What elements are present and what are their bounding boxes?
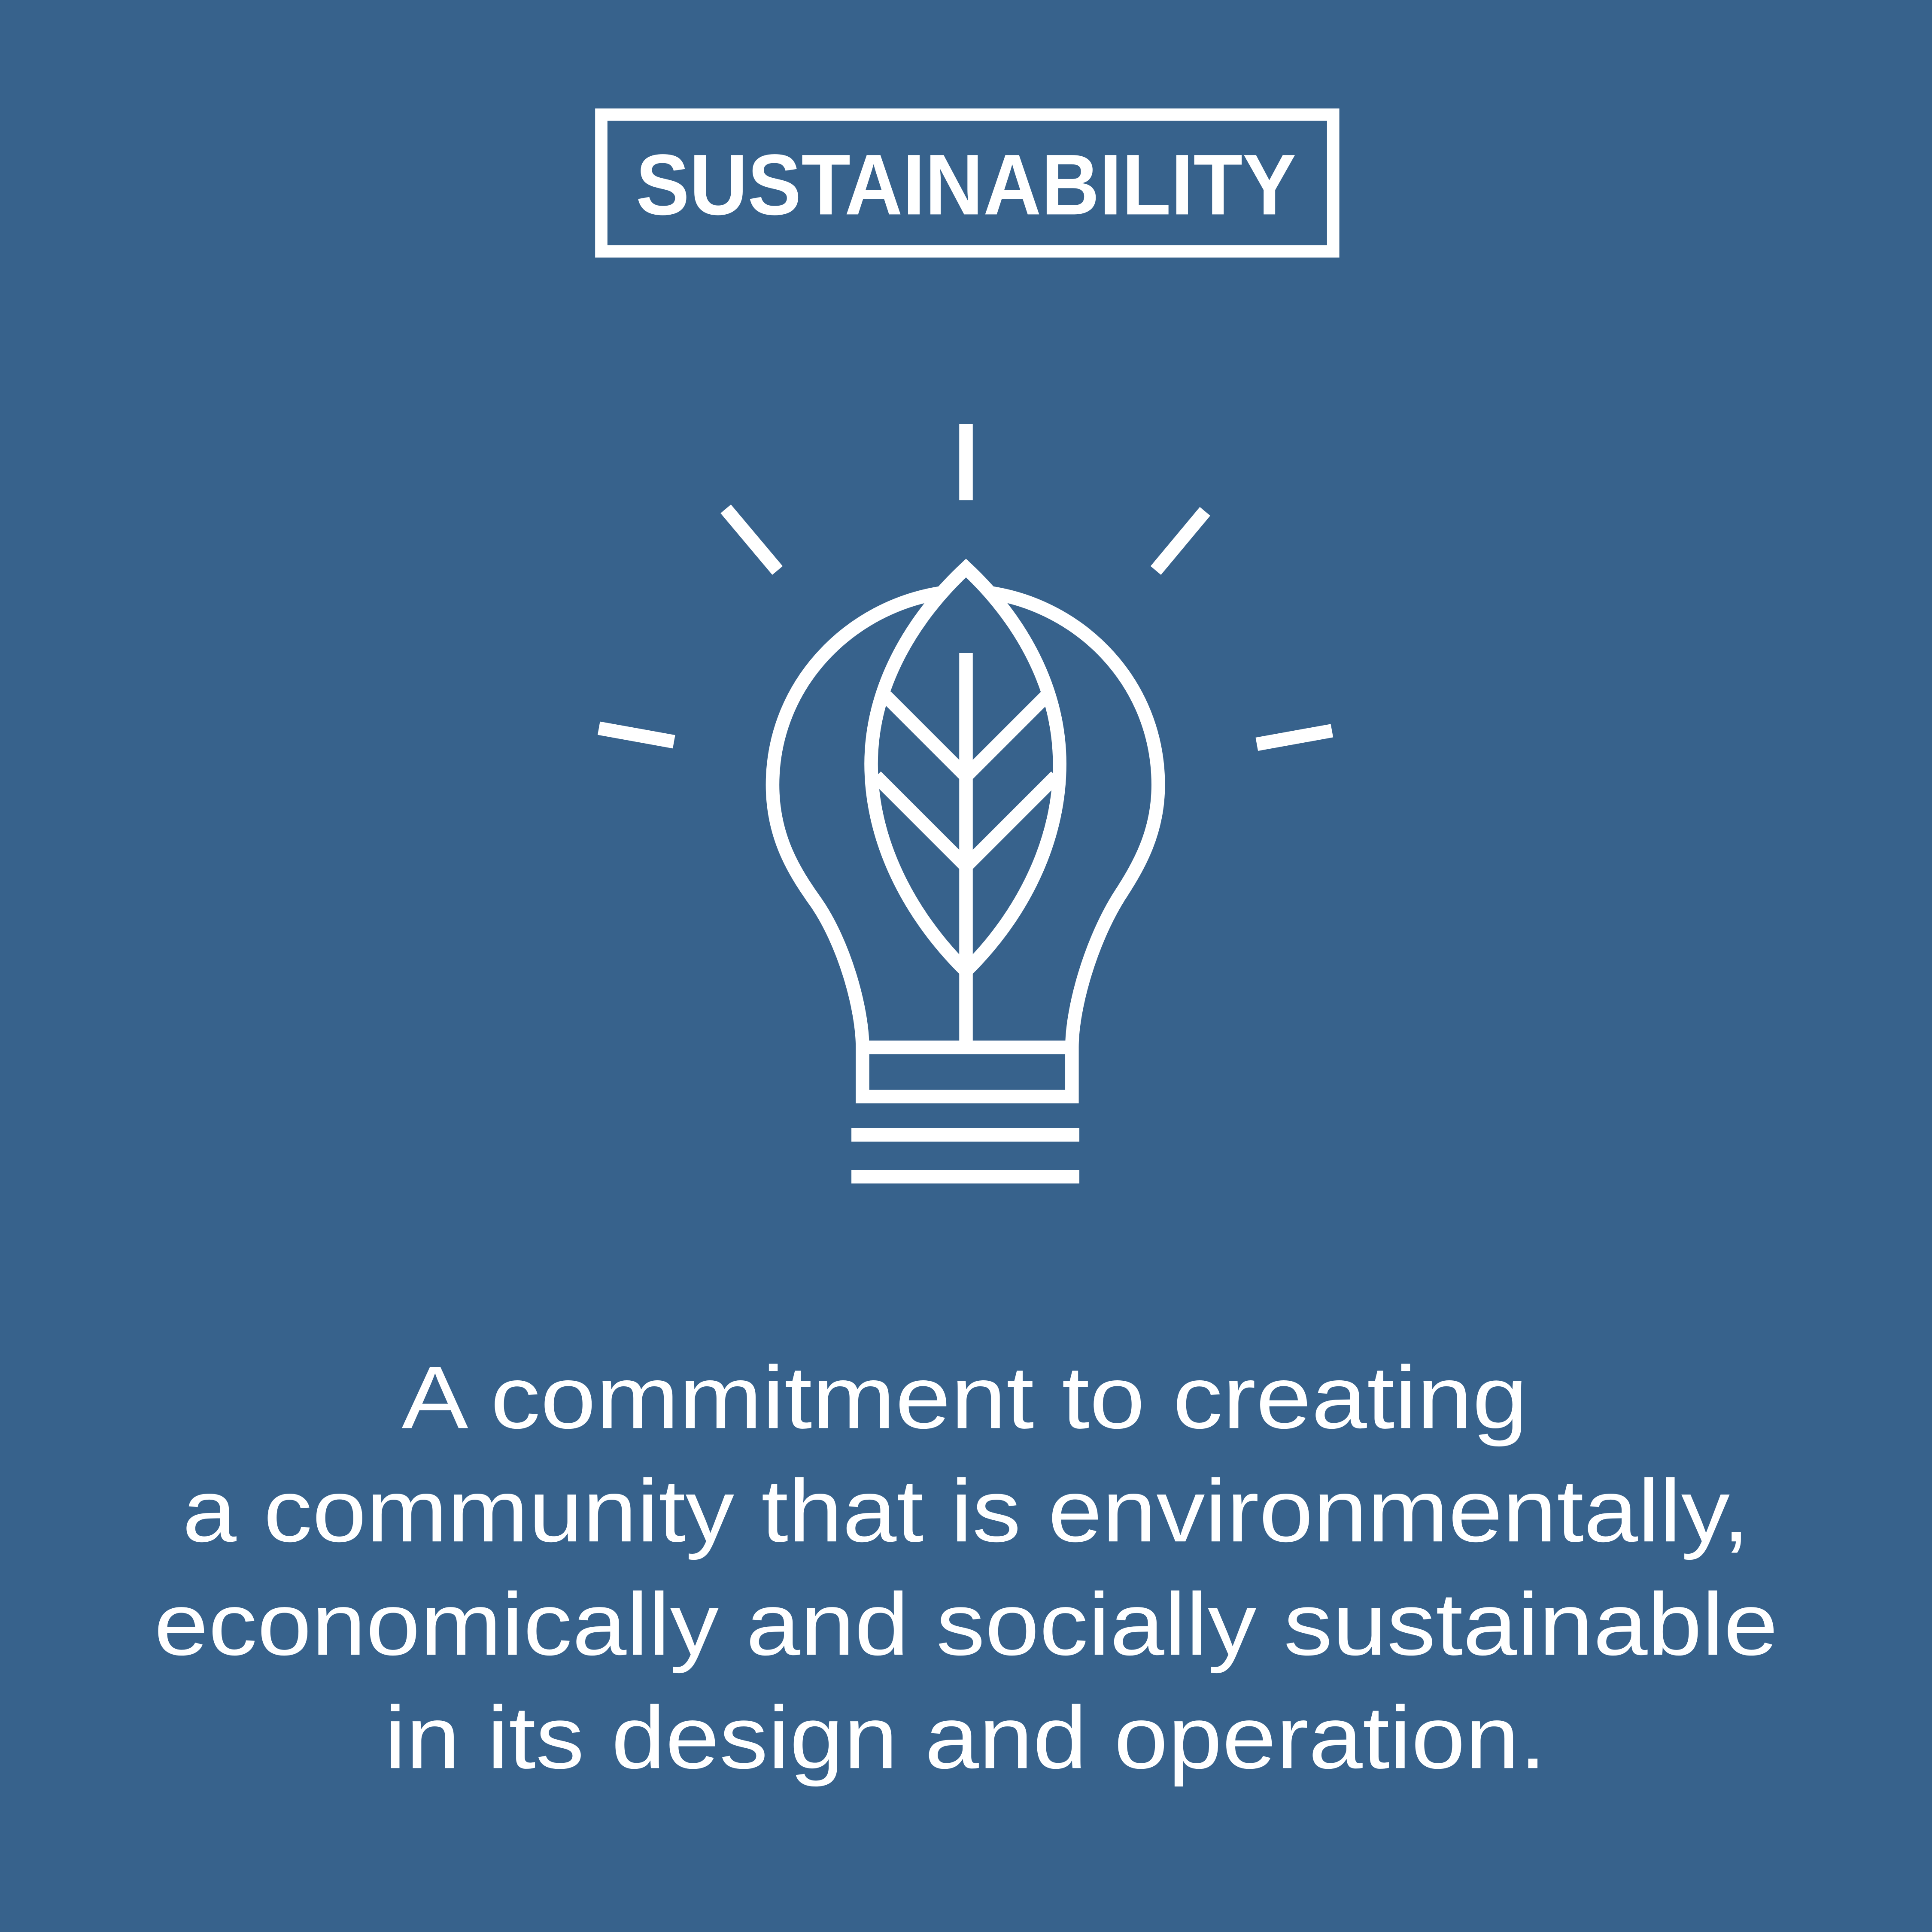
text block: description: economically and socially sustainable xyxy=(154,1574,1778,1674)
leaf veins xyxy=(963,653,969,1047)
text block: description: a community that is environmentally, xyxy=(182,1461,1750,1560)
leaf xyxy=(871,568,1060,971)
text block: description: in its design and operation. xyxy=(384,1688,1546,1787)
title: SUSTAINABILITY xyxy=(636,136,1296,233)
title xyxy=(601,115,1333,251)
text block: description xyxy=(154,1348,1778,1787)
bulb outline xyxy=(772,592,1158,1097)
text block: description: A commitment to creating xyxy=(402,1348,1528,1447)
bulb base xyxy=(863,1045,1072,1050)
rays xyxy=(599,424,1332,744)
icon: light bulb with leaf xyxy=(599,424,1332,1177)
